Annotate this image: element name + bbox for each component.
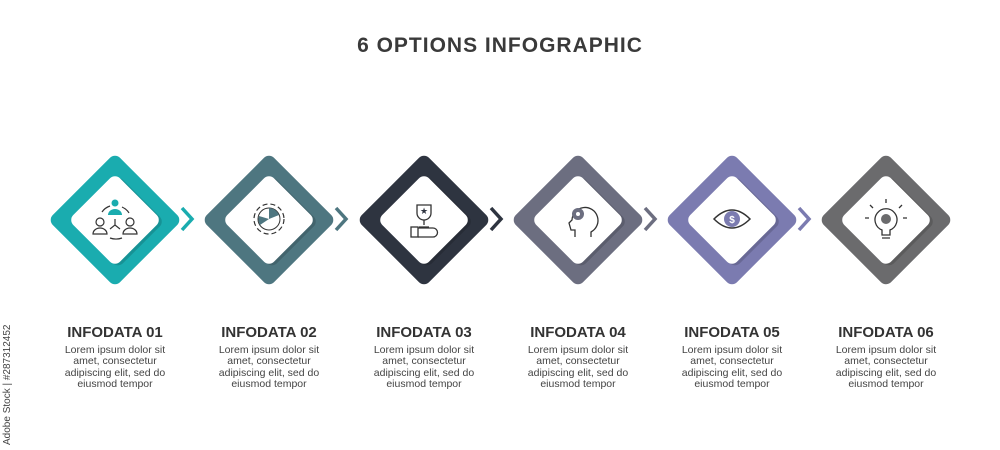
diamond 1	[50, 156, 180, 284]
diamond 2	[204, 156, 334, 284]
text 1	[65, 344, 166, 390]
text 3: eiusmod tempor	[386, 378, 462, 390]
text 4: amet, consectetur	[536, 355, 620, 367]
text 1: adipiscing elit, sed do	[65, 367, 165, 379]
text 6: adipiscing elit, sed do	[836, 367, 936, 379]
text 3: Lorem ipsum dolor sit	[374, 344, 474, 356]
heading 6: INFODATA 06	[838, 324, 934, 341]
arrow 3	[490, 206, 504, 232]
option 4	[514, 156, 642, 390]
diamond 5	[668, 156, 796, 284]
diamond 4	[514, 156, 642, 284]
text 5: Lorem ipsum dolor sit	[682, 344, 782, 356]
text 6: eiusmod tempor	[848, 378, 924, 390]
arrow 4	[644, 206, 658, 232]
text 3: amet, consectetur	[382, 355, 466, 367]
text 5	[682, 344, 782, 390]
text 4: adipiscing elit, sed do	[528, 367, 628, 379]
stock id vertical text: Adobe Stock | #287312452	[2, 325, 13, 445]
text 2: adipiscing elit, sed do	[219, 367, 319, 379]
text 1: amet, consectetur	[73, 355, 157, 367]
diamond 6	[822, 156, 950, 284]
heading 5: INFODATA 05	[684, 324, 780, 341]
title: 6 OPTIONS INFOGRAPHIC	[357, 34, 643, 57]
text 5: amet, consectetur	[690, 355, 774, 367]
text 6	[836, 344, 936, 390]
text 2: amet, consectetur	[227, 355, 311, 367]
option 2	[204, 156, 334, 390]
heading 1: INFODATA 01	[67, 324, 163, 341]
option 6	[822, 156, 950, 390]
arrow 2	[334, 206, 348, 232]
text 2: eiusmod tempor	[231, 378, 307, 390]
text 3: adipiscing elit, sed do	[374, 367, 474, 379]
arrow 1	[180, 206, 194, 232]
option 3	[360, 156, 488, 390]
option 1	[50, 156, 180, 390]
heading 3: INFODATA 03	[376, 324, 472, 341]
diamond 5: $	[729, 215, 735, 226]
text 6: amet, consectetur	[844, 355, 928, 367]
diamond 3: ★	[420, 206, 428, 216]
text 2	[219, 344, 320, 390]
text 1: Lorem ipsum dolor sit	[65, 344, 165, 356]
option 5	[668, 156, 796, 390]
text 2: Lorem ipsum dolor sit	[219, 344, 319, 356]
text 6: Lorem ipsum dolor sit	[836, 344, 936, 356]
text 5: adipiscing elit, sed do	[682, 367, 782, 379]
diamond 3	[360, 156, 488, 284]
text 4: eiusmod tempor	[540, 378, 616, 390]
text 1: eiusmod tempor	[77, 378, 153, 390]
text 5: eiusmod tempor	[694, 378, 770, 390]
text 3	[374, 344, 474, 390]
text 4	[528, 344, 628, 390]
arrow 5	[798, 207, 812, 231]
text 4: Lorem ipsum dolor sit	[528, 344, 628, 356]
heading 2: INFODATA 02	[221, 324, 317, 341]
heading 4: INFODATA 04	[530, 324, 626, 341]
